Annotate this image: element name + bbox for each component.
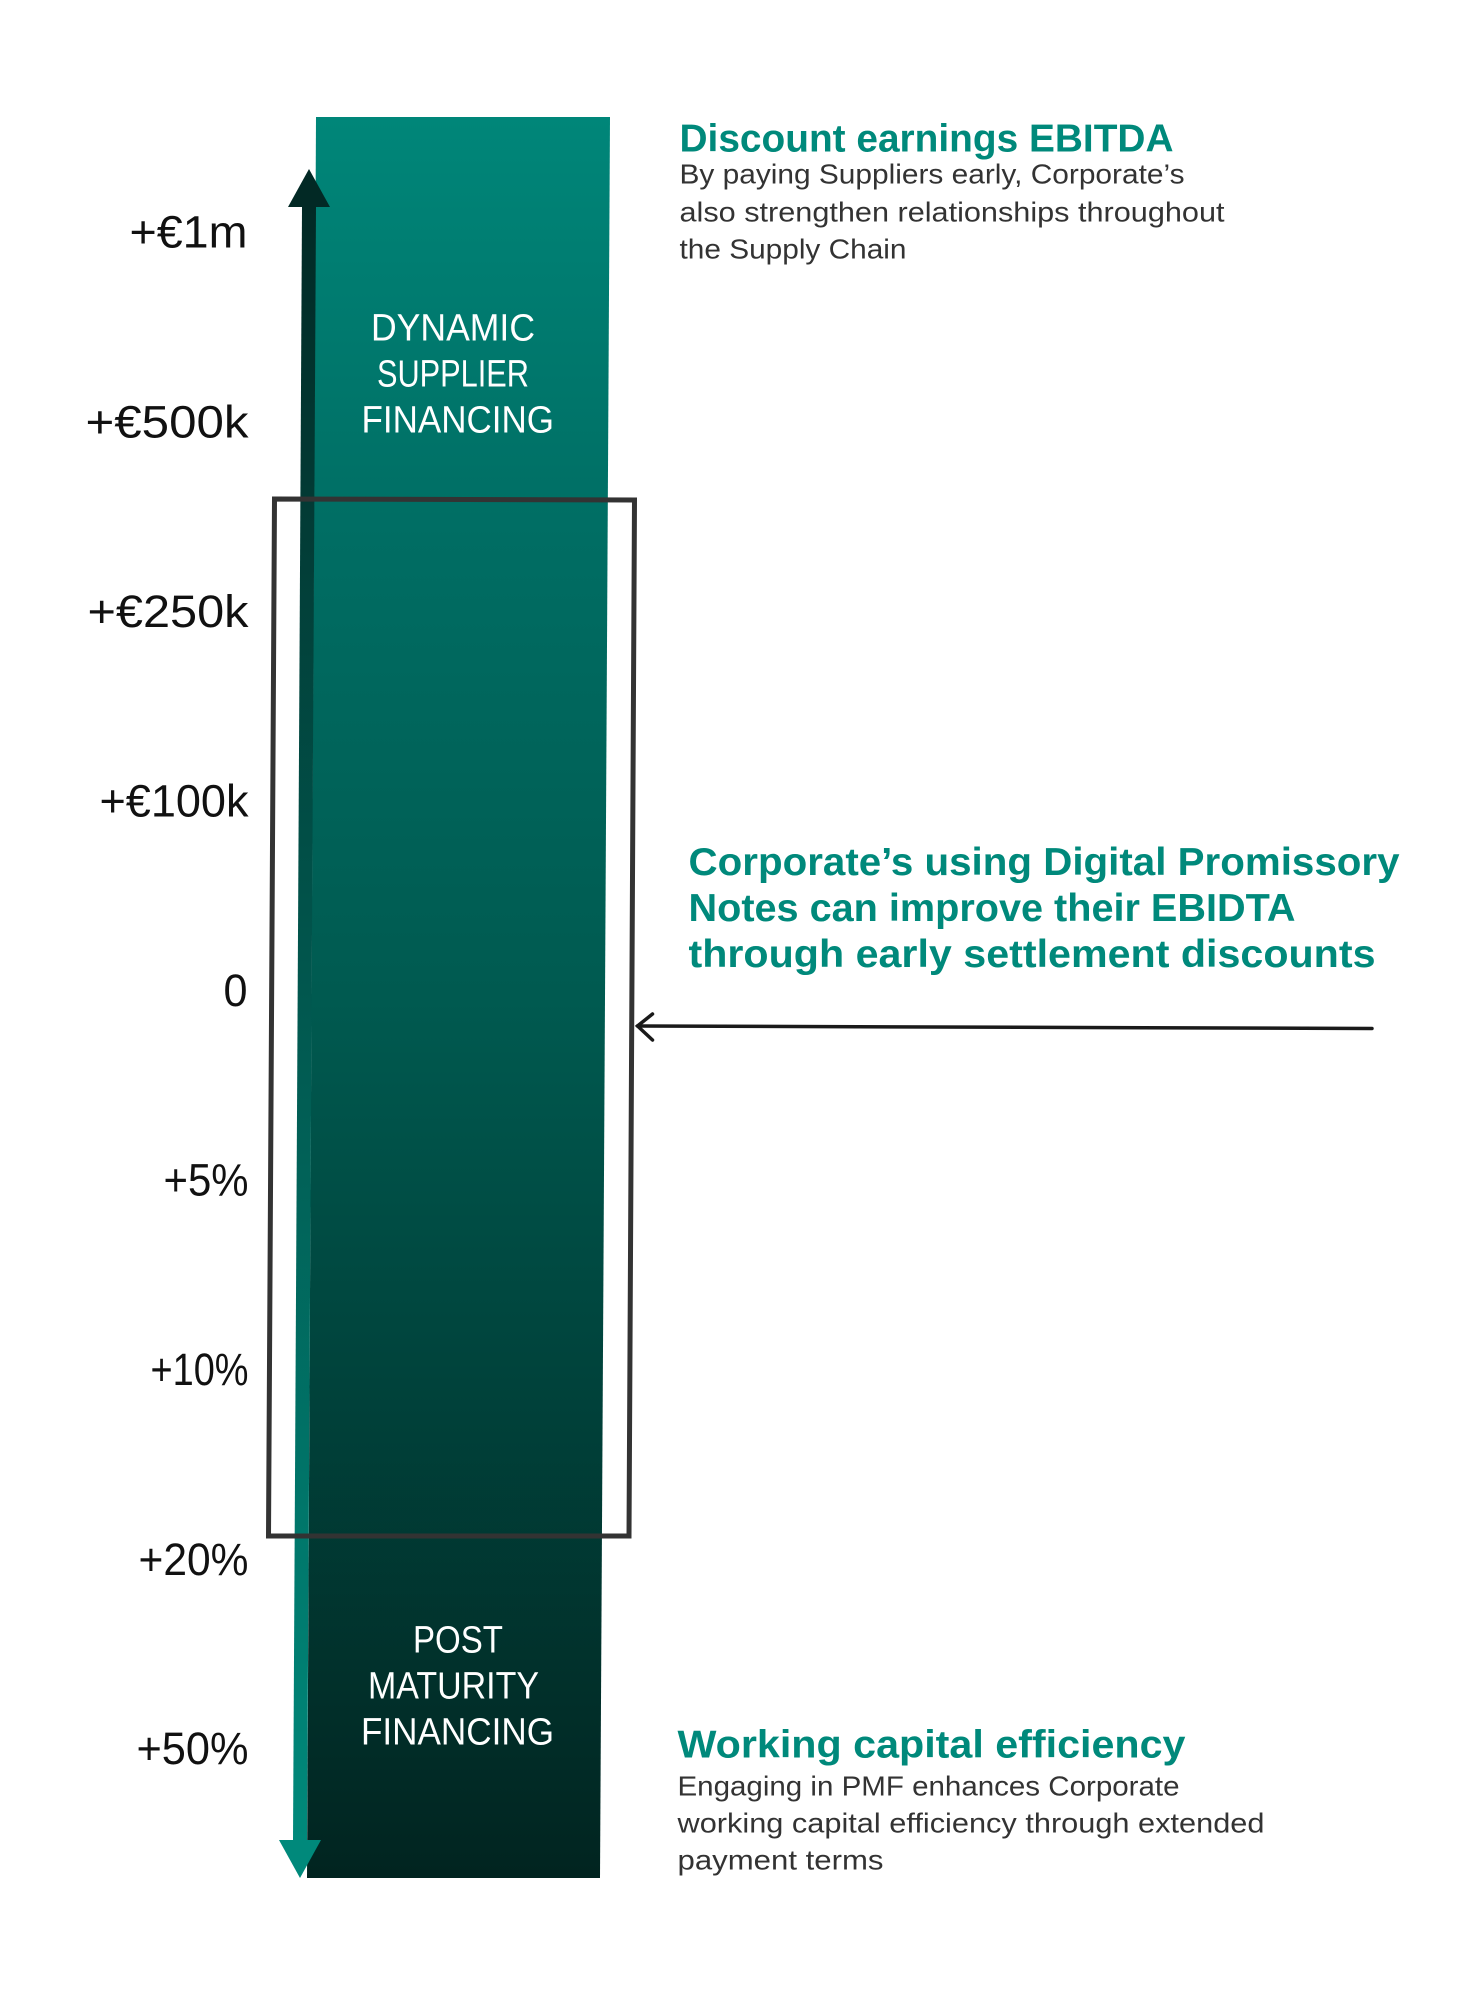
axis scale labels: +€250k — [88, 586, 249, 637]
axis scale labels — [86, 206, 249, 1774]
callout: digital promissory notes: through early settlement discounts — [688, 933, 1376, 976]
text block: working capital efficiency: Engaging in PMF enhances Corporate — [678, 1770, 1180, 1802]
axis scale labels: +€1m — [130, 206, 248, 258]
axis scale labels: +20% — [138, 1534, 248, 1585]
text block: discount earnings EBITDA: By paying Suppliers early, Corporate’s — [680, 158, 1184, 190]
panel: column label post maturity financing: POST — [413, 1620, 503, 1662]
panel: column label dynamic supplier financing — [362, 308, 554, 442]
text block: working capital efficiency: payment terms — [678, 1844, 884, 1876]
text block: discount earnings EBITDA — [680, 118, 1225, 264]
axis scale labels: +10% — [150, 1344, 248, 1395]
text block: working capital efficiency: Working capital efficiency — [678, 1724, 1186, 1766]
highlight frame around column — [268, 499, 634, 1536]
panel: column label post maturity financing — [361, 1620, 554, 1754]
panel: column label post maturity financing: MATURITY — [368, 1666, 539, 1708]
callout: digital promissory notes: Corporate’s using Digital Promissory — [688, 841, 1400, 884]
axis scale labels: +50% — [136, 1723, 248, 1774]
axis scale labels: +€500k — [86, 396, 249, 448]
icon: double-headed vertical axis arrow — [279, 169, 330, 1878]
arrow pointing to highlight frame — [638, 1014, 1372, 1040]
panel: column label post maturity financing: FINANCING — [361, 1712, 554, 1754]
panel: column label dynamic supplier financing: FINANCING — [362, 400, 554, 442]
text block: working capital efficiency: working capital efficiency through extended — [676, 1808, 1264, 1838]
callout: digital promissory notes: Notes can improve their EBIDTA — [688, 887, 1296, 930]
callout: digital promissory notes — [688, 841, 1400, 976]
panel: column label dynamic supplier financing: DYNAMIC — [371, 308, 535, 350]
axis scale labels: +€100k — [100, 776, 249, 826]
text block: discount earnings EBITDA: the Supply Chain — [680, 234, 906, 264]
gradient column — [307, 117, 610, 1878]
axis scale labels: +5% — [164, 1154, 248, 1206]
text block: discount earnings EBITDA: Discount earnings EBITDA — [680, 118, 1174, 160]
text block: discount earnings EBITDA: also strengthen relationships throughout — [680, 196, 1225, 228]
text block: working capital efficiency — [676, 1724, 1264, 1876]
axis scale labels: 0 — [224, 965, 248, 1016]
panel: column label dynamic supplier financing: SUPPLIER — [377, 354, 529, 396]
